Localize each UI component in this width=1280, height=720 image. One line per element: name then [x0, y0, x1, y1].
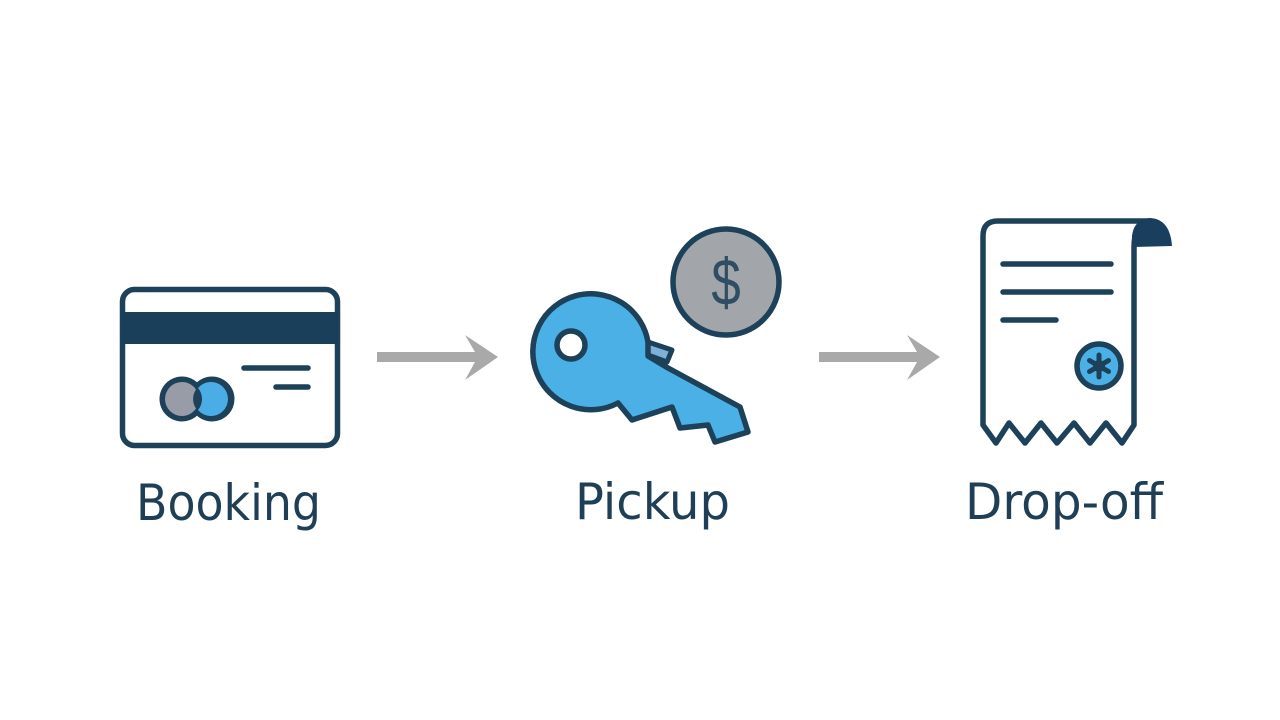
icon: seal [1077, 344, 1121, 388]
icon: key [533, 294, 748, 442]
arrow: Pickup to Drop-off [819, 335, 940, 380]
arrow: Booking to Pickup [377, 335, 498, 380]
step 2: Pickup [533, 229, 779, 531]
step 1: Booking [122, 290, 338, 532]
label: Pickup: Pickup [575, 473, 730, 531]
label: Drop-off: Drop-off [965, 473, 1165, 531]
icon: credit card [122, 290, 338, 446]
icon: dollar coin [673, 229, 779, 335]
icon: dollar coin: $ [711, 245, 741, 319]
step 3: Drop-off [965, 218, 1172, 531]
icon: receipt [983, 218, 1172, 443]
label: Booking: Booking [136, 474, 321, 532]
